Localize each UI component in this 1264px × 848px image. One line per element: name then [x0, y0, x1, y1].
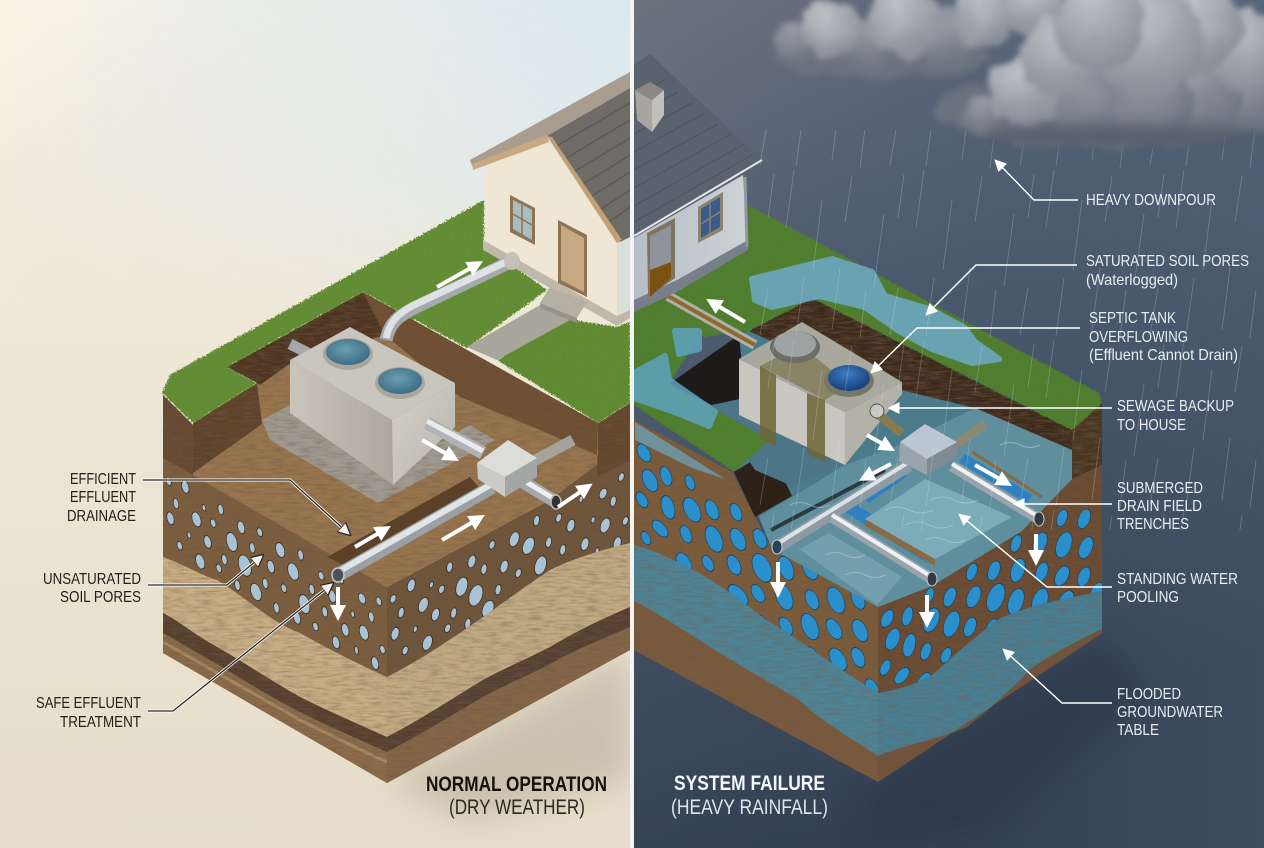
- callout: heavy downpour: [996, 161, 1216, 209]
- callout: heavy downpour: HEAVY DOWNPOUR: [1086, 192, 1216, 209]
- callout: safe effluent treatment: SAFE EFFLUENT: [36, 695, 141, 712]
- backup pipe to house: [668, 296, 755, 345]
- sewage stains: [760, 366, 825, 462]
- callout: sewage backup: TO HOUSE: [1117, 417, 1186, 434]
- callout: flooded groundwater: GROUNDWATER: [1117, 704, 1223, 721]
- callout: sewage backup: SEWAGE BACKUP: [1117, 398, 1234, 415]
- overflowing septic tank: [739, 322, 902, 465]
- soil block left face: [163, 395, 387, 783]
- callout: submerged drain field: DRAIN FIELD: [1117, 498, 1202, 515]
- callout: submerged drain field: SUBMERGED: [1117, 480, 1203, 497]
- callout: saturated soil pores: [927, 253, 1249, 314]
- callout: submerged drain field: [1015, 480, 1203, 533]
- distribution pipes and box: [332, 421, 573, 582]
- lid 1: [323, 338, 373, 370]
- wall: [634, 175, 748, 307]
- callout: efficient effluent drainage: [67, 471, 349, 534]
- callout: sewage backup: [890, 398, 1234, 434]
- flow arrows: [661, 272, 1036, 620]
- chimney: [635, 82, 664, 132]
- house: dry weather: [470, 72, 630, 326]
- callout: flooded groundwater: TABLE: [1117, 722, 1159, 739]
- window: [510, 195, 535, 245]
- heading: normal operation: [426, 773, 607, 819]
- callout: flooded groundwater: [1004, 650, 1223, 739]
- center slab: [865, 479, 1012, 566]
- grey lid: [770, 331, 820, 363]
- panel: system failure background: [634, 0, 1264, 848]
- front steps: [540, 287, 587, 323]
- grass turf: [162, 200, 630, 423]
- cloud underside: [980, 124, 1260, 148]
- storm clouds: [772, 0, 1264, 148]
- lid 2: [375, 367, 425, 399]
- soil block right face: [387, 440, 630, 783]
- inlet pipe from house: [386, 252, 520, 340]
- heading: normal operation: NORMAL OPERATION: [426, 773, 607, 796]
- callout: saturated soil pores: (Waterlogged): [1086, 272, 1178, 289]
- heading: system failure: (HEAVY RAINFALL): [671, 796, 828, 819]
- soil right face: [878, 465, 1102, 782]
- rain streaks: [760, 130, 1264, 530]
- illustration: dry weather soil block: [162, 200, 630, 783]
- saturated soil pores: [636, 444, 1102, 693]
- front slab: [799, 533, 902, 605]
- unsaturated soil pores: [166, 465, 628, 677]
- wet grass: [634, 205, 1102, 472]
- callout: flooded groundwater: FLOODED: [1117, 686, 1181, 703]
- downspout: [745, 177, 747, 247]
- drain trench: [327, 477, 484, 568]
- blue water channels: [842, 458, 1030, 558]
- callout: septic tank overflowing: SEPTIC TANK: [1089, 310, 1176, 327]
- door: [558, 220, 587, 297]
- callout: standing water: POOLING: [1117, 589, 1179, 606]
- heading: normal operation: (DRY WEATHER): [449, 796, 585, 819]
- callout: safe effluent treatment: TREATMENT: [60, 714, 141, 731]
- callout: unsaturated soil pores: SOIL PORES: [60, 589, 141, 606]
- callout: efficient effluent drainage: DRAINAGE: [67, 508, 136, 525]
- right cloud: [935, 0, 1264, 148]
- callout: safe effluent treatment: [36, 584, 332, 731]
- callout: septic tank overflowing: (Effluent Cannot Drain): [1089, 347, 1238, 364]
- roof: [470, 72, 630, 166]
- junction box: [477, 440, 537, 497]
- divider: [630, 0, 634, 848]
- ripples: [790, 442, 1040, 578]
- blue lid: [824, 365, 874, 397]
- flooded pit: [669, 298, 1102, 607]
- roof: [634, 54, 762, 236]
- submerged pipes: [772, 404, 1044, 586]
- house wall: [485, 140, 617, 317]
- soil left face: [634, 420, 878, 782]
- flood puddle: left: [634, 331, 715, 426]
- excavated pit floor: [193, 292, 630, 587]
- callout: septic tank overflowing: OVERFLOWING: [1089, 329, 1188, 346]
- left cloud: [772, 0, 1063, 78]
- callout: standing water: STANDING WATER: [1117, 571, 1238, 588]
- back right slab edge: [972, 452, 1042, 497]
- gravel bed: [262, 405, 495, 503]
- house: heavy rainfall: [634, 54, 762, 312]
- garden path: [467, 305, 570, 360]
- window: [698, 192, 723, 243]
- callout: standing water: [960, 515, 1238, 606]
- door: [647, 218, 675, 297]
- callout: efficient effluent drainage: EFFLUENT: [70, 489, 136, 506]
- panel: normal operation background: [0, 0, 630, 848]
- waterlogged trench slabs: [759, 408, 1072, 607]
- heading: system failure: [671, 772, 828, 819]
- callout: septic tank overflowing: [872, 310, 1238, 372]
- callout: unsaturated soil pores: [43, 556, 262, 606]
- flood puddle: lawn: [752, 259, 999, 363]
- tarp flap: [635, 422, 725, 479]
- callout: unsaturated soil pores: UNSATURATED: [43, 571, 141, 588]
- dark gap beside main pipe: [771, 470, 885, 530]
- septic tank: [290, 327, 455, 485]
- flow arrows: [338, 440, 586, 613]
- junction box: [899, 424, 957, 475]
- callout: efficient effluent drainage: EFFICIENT: [70, 471, 136, 488]
- callout: submerged drain field: TRENCHES: [1117, 516, 1189, 533]
- heading: system failure: SYSTEM FAILURE: [674, 772, 825, 795]
- illustration: heavy rainfall soil block: [634, 205, 1103, 782]
